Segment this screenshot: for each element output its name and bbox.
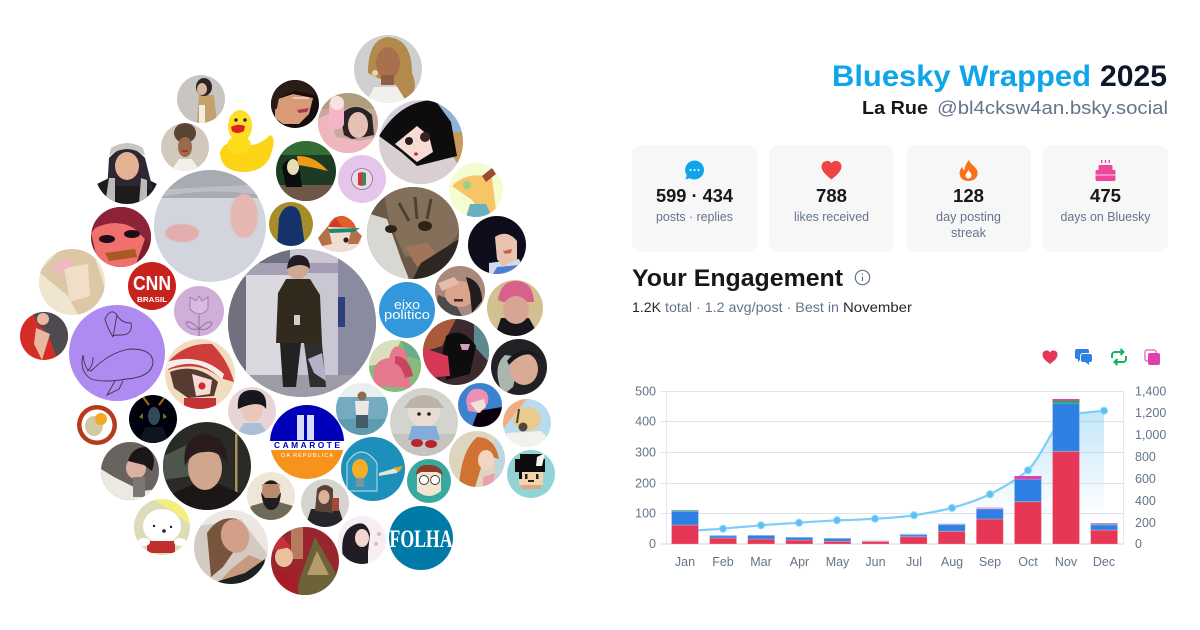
stat card: days on Bluesky: 475 [1090,186,1121,206]
avatar: illustrated girl with keffiyeh [97,143,157,204]
avatar: pink sea creature Lickitung [369,340,421,392]
avatar: anime girl with black hair [379,100,463,184]
icon: birthday cake [1096,160,1116,181]
avatar: Eixo Político logo: politico [384,308,430,322]
engagement summary: total · 1.2 avg/post · Best in [665,299,839,315]
right axis labels: 600 [1135,472,1156,486]
avatar: woman with phone [301,479,349,527]
month labels: Apr [790,555,809,569]
avatar: girl with pink toy [318,93,378,153]
user name and handle [862,98,1168,118]
avatar: dog with propeller cap [318,216,362,252]
avatar cluster [20,35,555,595]
right axis labels: 0 [1135,537,1142,551]
engagement summary: November [843,299,912,315]
avatar: pixel-art boy [507,450,555,498]
icon: info [855,270,870,285]
left axis labels: 300 [635,446,656,460]
line markers [720,407,1108,532]
avatar: fried egg logo [77,405,117,445]
title: Bluesky Wrapped [832,60,1091,93]
stacked bars [672,399,1118,544]
month labels: Jun [865,555,886,569]
avatar: Eixo Político logo [379,282,435,338]
stat card: streak [906,145,1031,252]
avatar: toucan [276,141,336,201]
stat card: days on Bluesky: days on Bluesky [1060,210,1151,224]
left axis labels: 500 [635,384,656,398]
avatar: woman with Christmas tree [271,527,339,595]
stat card: likes: 788 [816,186,847,206]
title: 2025 [1100,60,1167,93]
icon: replies [1075,349,1092,365]
avatar: wool lamb figure [390,388,458,456]
avatar: Folha logo: FOLHA [390,526,452,553]
avatar: yellow bird fish cartoon [449,163,503,217]
avatar: red manga face [91,207,151,267]
engagement summary [632,299,912,315]
stat card: streak: day posting [936,210,1001,224]
month labels: Oct [1018,555,1038,569]
avatar: comic woman [271,80,319,128]
avatar: girl at sea [336,383,388,435]
cumulative area [685,411,1104,544]
avatar: light bulb in cage [341,437,405,501]
icon: quotes [1145,350,1160,365]
avatar: young man close-up dark room [163,422,251,510]
stat card: posts and replies: posts · replies [656,210,733,224]
avatar: ink girl with flowers [338,516,386,564]
avatar: boy with hand on cheek [228,387,276,435]
avatar: dark horned figure [129,395,177,443]
avatar: blue figure on gold [269,202,313,246]
month labels: Jul [906,555,922,569]
avatar: cat close-up [367,187,459,279]
avatar: CNN Brasil logo [128,262,176,310]
avatar: bearded man [247,472,295,520]
stat card: posts and replies: 599 · 434 [656,186,733,206]
right axis labels [1135,384,1166,551]
month labels: May [826,555,850,569]
avatar: rubber duck [220,110,274,172]
avatar: Camarote da República logo: DA REPÚBLICA [281,452,333,459]
chart legend [1042,349,1160,365]
engagement chart [635,384,1166,569]
stat card: likes [769,145,894,252]
avatar: pink-haired person [487,280,543,336]
avatar: Camarote da República logo: CAMAROTE [274,440,340,450]
avatar: Eixo Político logo: eixo [394,298,420,312]
right axis labels: 200 [1135,516,1156,530]
left axis labels: 400 [635,414,656,428]
avatar: whale and butterfly sketch [69,305,165,401]
month labels: Jan [675,555,695,569]
engagement summary: 1.2K [632,299,662,315]
month labels: Sep [979,555,1001,569]
icon: likes [1042,350,1058,364]
right axis labels: 400 [1135,494,1156,508]
avatar: blonde woman portrait [354,35,422,103]
month labels [675,555,1115,569]
avatar: anime girl in Santa hat [165,339,235,409]
avatar: CNN Brasil logo: BRASIL [137,295,167,304]
avatar: blonde with headphones [503,399,551,447]
avatar: white puppy cartoon [134,499,190,555]
stat card: posts and replies [632,145,757,252]
icon: heart [822,161,842,180]
avatar: man with moustache lying down [435,266,485,316]
left axis labels [635,384,656,551]
avatar: lilac tulip [174,286,224,336]
left axis labels: 100 [635,506,656,520]
month labels: Dec [1093,555,1115,569]
user name and handle: @bl4cksw4an.bsky.social [937,98,1168,118]
cumulative line [685,411,1104,531]
stat card: likes: likes received [794,210,869,224]
right axis labels: 1,400 [1135,384,1166,398]
month labels: Feb [712,555,734,569]
avatar: cartoon man with glasses [407,459,451,503]
avatar: pale anime character [39,249,105,315]
month labels: Mar [750,555,772,569]
month labels: Aug [941,555,963,569]
icon: chat bubble [685,160,704,180]
avatar: Folha logo [389,506,453,570]
right axis labels: 1,000 [1135,428,1166,442]
avatar: pink-haired anime [458,383,502,427]
right axis labels: 1,200 [1135,406,1166,420]
avatar: feet in bath foam [154,170,266,282]
avatar: Camarote da República logo [270,405,344,480]
avatar: pink circle emblem [338,155,386,203]
month labels: Nov [1055,555,1078,569]
stat card: streak: streak [951,226,987,240]
avatar: woman with silver hair [491,339,547,395]
stat card: streak: 128 [953,186,984,206]
avatar: man in brown jacket, mirror photo [228,249,376,397]
heading: Your Engagement: Your Engagement [632,265,843,292]
avatar: woman lying on pillow [194,510,268,584]
avatar: woman with curly hair [161,123,209,171]
stat card: days on Bluesky [1043,145,1168,252]
left axis labels: 0 [649,537,656,551]
avatar: red dress illustration [20,312,68,360]
avatar: woman in grey room [177,75,225,123]
avatar: mirror selfie boy [101,442,159,500]
user name and handle: La Rue [862,98,928,118]
right axis labels: 800 [1135,450,1156,464]
avatar: Spider-Man art [423,319,489,385]
icon: reposts [1112,349,1126,365]
avatar: CNN Brasil logo: CNN [133,273,171,295]
icon: flame [960,160,978,181]
avatar: dark-haired boy [468,216,526,274]
avatar: orange-haired anime [449,431,505,487]
left axis labels: 200 [635,476,656,490]
